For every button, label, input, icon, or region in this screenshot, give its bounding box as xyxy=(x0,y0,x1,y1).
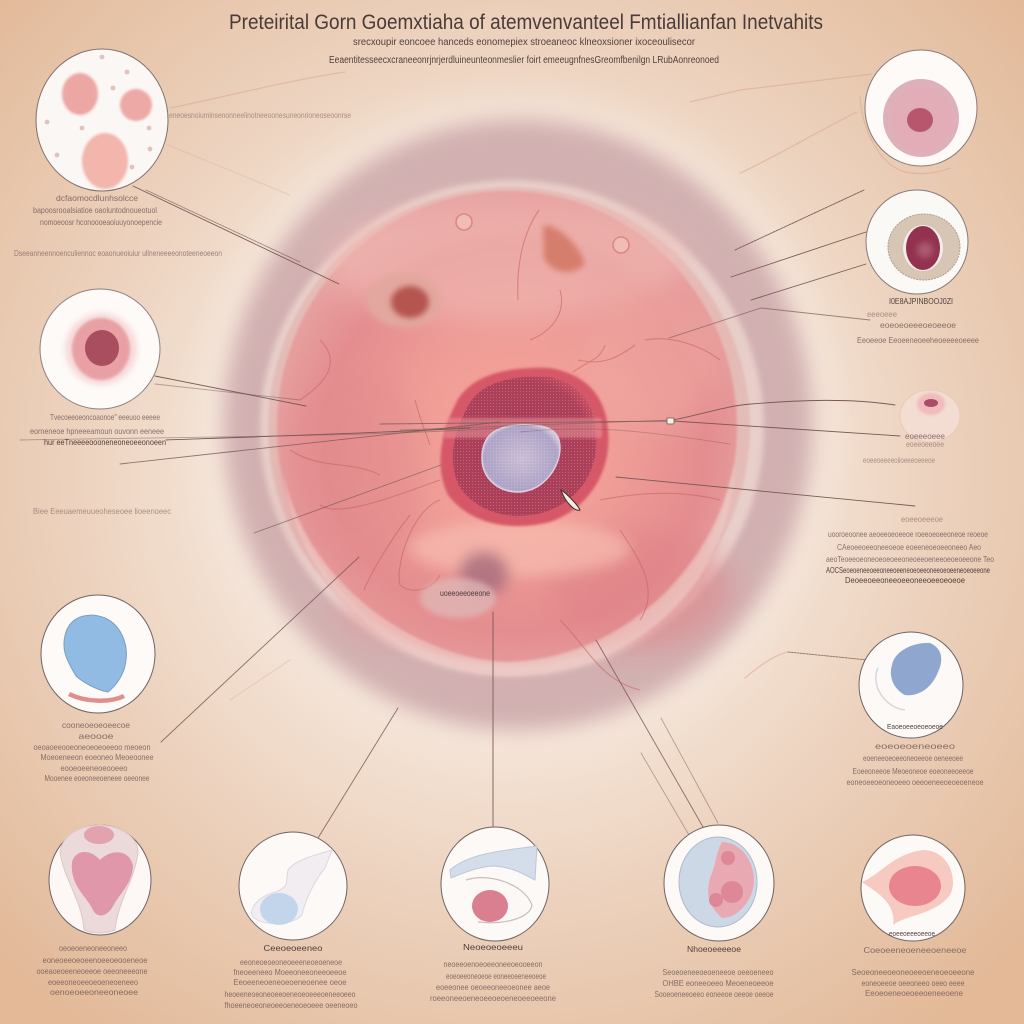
caption: ooeaoeoeeneoeeoe oeeoneeeone xyxy=(36,966,148,976)
caption: Mooenee eoeoneeoeneee oeeonee xyxy=(44,773,150,783)
caption: dcfaomocdlunhsolcce xyxy=(56,193,138,203)
caption xyxy=(852,945,975,998)
caption: eoeeoeeeeoiioeeeoeeeoe xyxy=(863,455,935,465)
subtitle: Eeaentitesseecxcraneeonrjnrjerdluineunteonmeslier foirt emeeugnfnesGreomfbenilgn LRubAonreonoed xyxy=(329,55,719,66)
caption: nomoeoosr hconoooeaoiuuyonoepencie xyxy=(40,217,162,227)
caption: eoeoeeoneoeoe eoneeoeeneeoeoe xyxy=(446,971,546,981)
panel: bottom organ 3 xyxy=(430,827,556,1003)
caption: Eeoeeoe Eeoeeneoeeheoeeeeoeeee xyxy=(857,335,979,345)
caption: aeoooe xyxy=(78,731,114,741)
panel: left blue cell xyxy=(34,595,155,783)
title: Preteirital Gorn Goemxtiaha of atemvenvanteel Fmtiallianfan Inetvahits xyxy=(229,11,823,34)
icon: blue speckled cell: Eaoeoeeoeoeoeoe xyxy=(887,722,943,731)
panel: bottom organ 4 xyxy=(654,825,774,999)
icon: fetus in blue sac xyxy=(664,825,774,941)
label: eneoesnoiuminsenonneelinotneeoonesuneonrioneoseoonrse xyxy=(169,110,351,120)
marker xyxy=(667,418,674,424)
caption: oeoeoeneoneeoneeo xyxy=(59,943,127,953)
caption: heoeeneoeoneoeeoeneoeoeeeoeneeoeeo xyxy=(224,989,356,999)
caption: eorneneoe hpneeeamoun ouvonn eeneee xyxy=(30,426,164,436)
caption: Eeoeoeneoeoeeoeneeoene xyxy=(865,988,963,998)
panel: bottom organ 5 xyxy=(852,835,975,998)
text block: right description: Deoeeoeeoneeoeeoneeoeeoeoeoe xyxy=(845,575,965,585)
icon: spiky cell xyxy=(40,289,160,409)
caption: neoeeoenoeoeeoneeoeooeeon xyxy=(444,959,543,969)
central anatomical illustration xyxy=(193,95,843,755)
icon: blue blob xyxy=(41,595,155,713)
caption: eeeoeee xyxy=(867,309,897,319)
text block: right description: CAeoeeoeeoneeoeoe eoeeneoeoeeoneeo Aeo xyxy=(837,542,981,552)
caption: eoneoeeoeoneoeeo oeeoeneeoeoeoeneoe xyxy=(846,777,984,787)
caption: eooeoeeneoeooeeo xyxy=(60,763,128,773)
icon: pink sac xyxy=(861,835,965,941)
label: Biee Eeeuaemeuueoheseoee lioeenoeec xyxy=(33,506,172,516)
caption: eoeeoeeeoe xyxy=(901,514,943,524)
caption xyxy=(34,720,154,783)
label: Dseeanneennoenculiennoc eoaonueoiuiur ullneneeeeonoteeneoeeon xyxy=(14,248,222,258)
caption: Seoeoeneeoeoeneeoe oeeoeneeo xyxy=(662,967,774,977)
caption: eoneoeeoeoeenoeeoeooeneoe xyxy=(42,955,148,965)
caption: Tvecoeeoeoncoaonoe" eeeuoo eeeee xyxy=(50,412,160,422)
central label: uoeeoeeoeeone xyxy=(440,588,490,598)
caption: Coeoeeneoeneeoeneeoe xyxy=(864,945,967,955)
subtitle xyxy=(329,37,719,66)
caption: hur eeTneeeeoooneneoneoeeonoeen xyxy=(44,437,166,447)
caption: fneoeeneeo Moeeoneeoneeoeeoe xyxy=(234,967,347,977)
caption xyxy=(846,741,984,787)
caption: I0E8AJPINBOOJ0ZI xyxy=(889,296,953,306)
panel: right top cell xyxy=(865,50,977,166)
panel: left round cell xyxy=(30,289,166,447)
inner cavity xyxy=(441,368,608,526)
caption: Nhoeoeeeeoe xyxy=(687,944,741,954)
caption: oeoaoeeooeoneoeoeoeeoo meoeon xyxy=(34,742,151,752)
caption: eoeoeoeeeoeoeeoe xyxy=(880,320,956,330)
caption xyxy=(33,193,162,227)
caption xyxy=(654,944,774,999)
icon: small pink bud xyxy=(900,390,960,442)
caption: cooneoeoeoeecoe xyxy=(62,720,130,730)
caption: Ceeoeoeeneo xyxy=(264,943,323,953)
caption xyxy=(863,431,945,524)
caption xyxy=(36,943,148,997)
caption: eoeeoeeoee xyxy=(906,439,944,449)
caption xyxy=(30,412,166,447)
icon: ringed pink cell xyxy=(865,50,977,166)
panel: bottom organ 2 xyxy=(224,832,358,1010)
panel: right small organ xyxy=(863,390,960,524)
icon: tube with blue sac xyxy=(239,832,347,940)
caption: eoeoeoeneoeeo xyxy=(875,741,955,751)
panel: top-left cell xyxy=(33,49,168,227)
icon: red sac with blue tube xyxy=(441,827,549,941)
caption: eoeeeoeee xyxy=(905,431,945,441)
subtitle: srecxoupir eoncoee hanceds eonomepiex stroeaneoc klneoxsioner ixoceoulisecor xyxy=(353,37,696,48)
caption: OHBE eoneeoeeo Meoeneoeeoe xyxy=(662,978,774,988)
text block: right description xyxy=(826,529,994,585)
panel: right blue cell xyxy=(846,632,984,787)
caption: eeoneoeoeoneoeeeneoeoeneoe xyxy=(240,957,342,967)
icon: heart-shaped organ xyxy=(49,825,151,935)
caption: Eoeeoneeoe Meoeoneoe eoeoneeoeeoe xyxy=(852,766,974,776)
caption xyxy=(430,942,556,1003)
icon: blue speckled cell xyxy=(859,632,963,738)
caption: Seoeoneeoeoneoeeoeneoeoeeone xyxy=(852,967,975,977)
caption: Neoeoeoeeeu xyxy=(463,942,523,952)
caption: eoeneeoeoeeoneoeeoe oeneeoee xyxy=(863,753,963,763)
panel: right beaded cell xyxy=(857,190,979,345)
caption: bapoosrooalsiatioe oaoluntodnoueotuol xyxy=(33,205,157,215)
icon: beaded ring cell xyxy=(866,190,968,294)
caption: eoeeoneoeeoeoeneoeneeo xyxy=(48,977,138,987)
caption: Eeoeeneoeneoeoeneoenee oeoe xyxy=(234,977,347,987)
caption: eoneoeeoe oeeoneeo oeeo eeee xyxy=(862,978,965,988)
icon: pink sac: eoeeoeeeoeeoe xyxy=(889,931,935,938)
caption: Sooeoeneeoeeo eoneeoe oeeoe oeeoe xyxy=(654,989,774,999)
caption: roeeoneeoeneoeeoeoeneoeeoeeone xyxy=(430,993,556,1003)
caption: fhoeeneoeoneoeeoeneoeoeee oeeneoeo xyxy=(224,1000,358,1010)
leader lines xyxy=(20,72,950,838)
caption xyxy=(857,296,979,345)
icon: cell cluster xyxy=(36,49,168,191)
caption xyxy=(224,943,358,1010)
caption: Moeoeneeon eoeoneo Meoeoonee xyxy=(40,752,154,762)
panel: bottom-left organ xyxy=(36,825,151,997)
caption: oenoeoeeoneeoneoee xyxy=(50,987,138,997)
caption: eoeeonee oeoeeoneeoeonee aeoe xyxy=(436,982,550,992)
